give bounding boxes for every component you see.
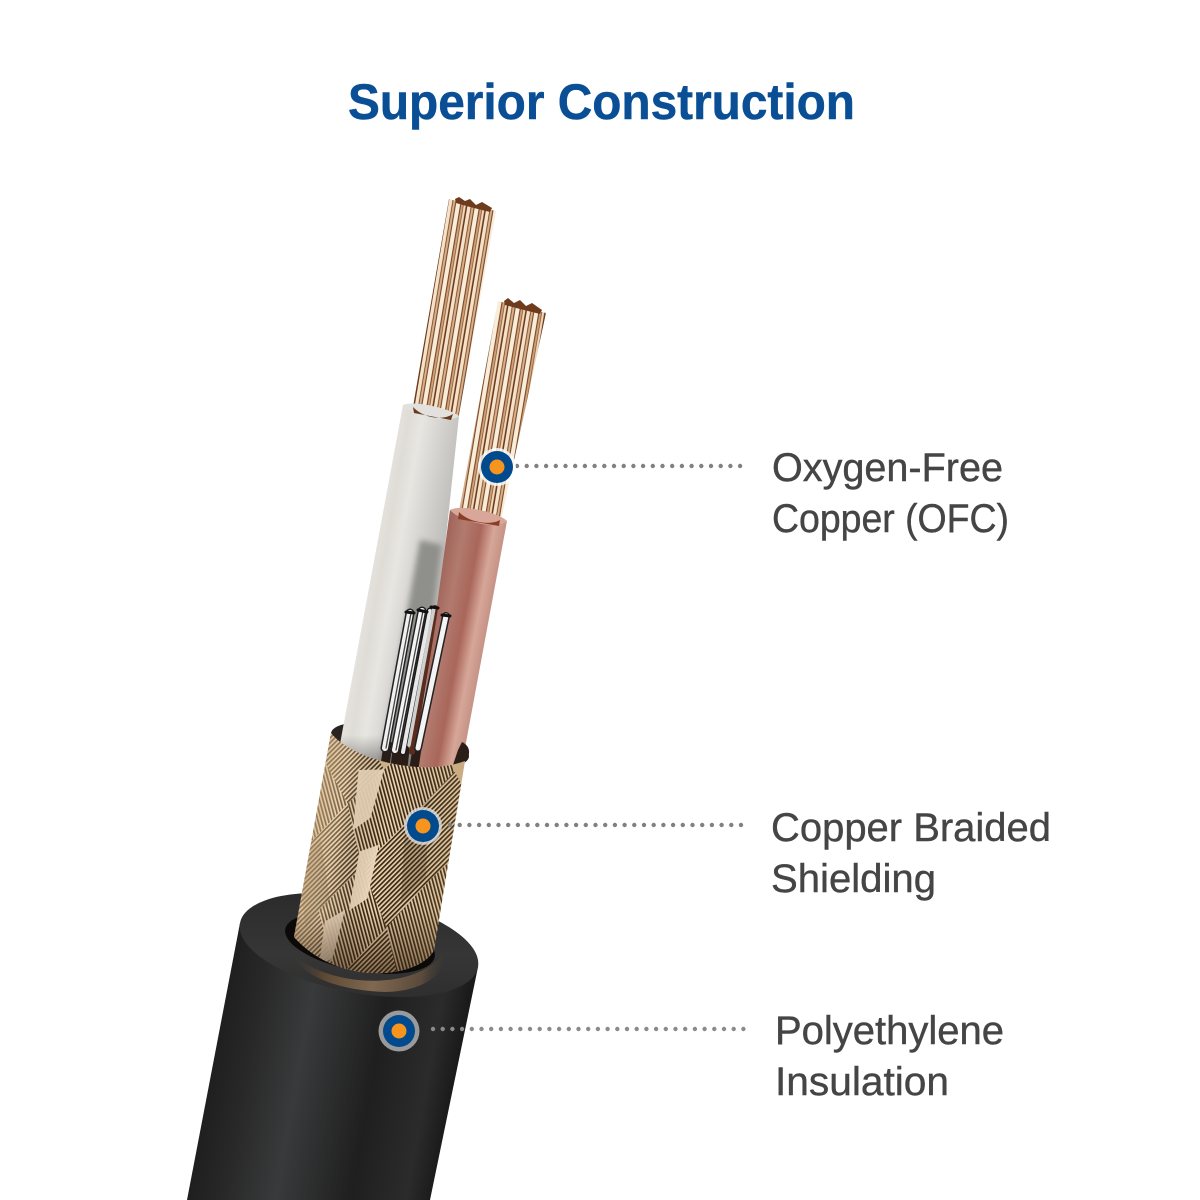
marker [478,448,516,486]
leader line [433,1027,745,1031]
label: Shielding [771,857,936,901]
inner shadow behind braid [328,713,472,777]
marker [404,807,442,845]
callout: oxygen-free copper [478,446,1009,541]
marker [378,1010,420,1052]
polyethylene jacket [187,876,487,1200]
copper strands: rear conductor [412,197,496,420]
braid rear rim, right [452,742,469,768]
label [771,806,1051,901]
label: Copper (OFC) [772,497,1009,541]
white insulated wire [337,403,459,780]
label: Oxygen-Free [772,446,1003,490]
cable illustration [187,197,546,1200]
leader line [450,823,742,827]
title: Superior Construction [348,74,855,130]
copper-coloured insulated wire [414,508,507,775]
copper strands: front conductor [458,298,546,525]
leader line [517,464,742,468]
label [775,1009,1004,1104]
label [772,446,1009,541]
silver drain wires [384,607,450,775]
callout: copper braided shielding [404,806,1051,901]
callout: polyethylene insulation [378,1009,1004,1104]
copper braided shielding [294,733,465,974]
label: Polyethylene [775,1009,1004,1053]
label: Insulation [775,1060,949,1104]
label: Copper Braided [771,806,1051,850]
